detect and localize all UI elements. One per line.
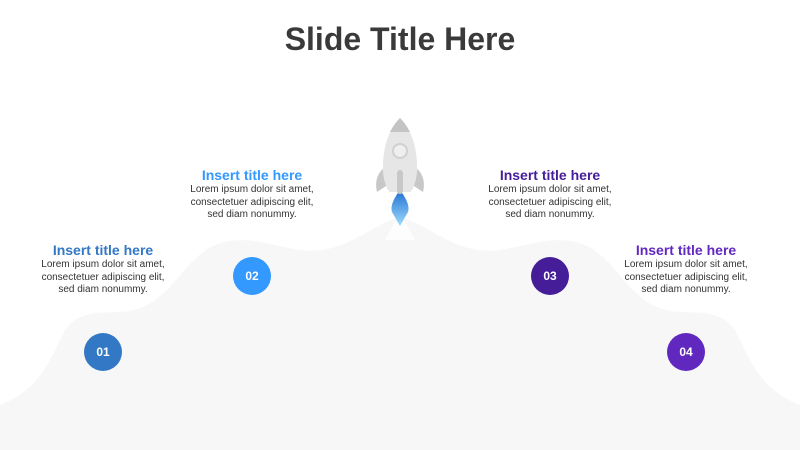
text block 04: Lorem ipsum dolor sit amet,: [624, 259, 748, 270]
text block 01: [41, 242, 165, 295]
title: Slide Title Here: [285, 21, 515, 57]
text block 03: [488, 167, 612, 220]
text block 02: consectetuer adipiscing elit,: [191, 196, 313, 208]
circle 04: [667, 333, 705, 371]
text block 02: Insert title here: [202, 167, 302, 183]
circle 04: 04: [679, 345, 693, 359]
circle 01: [84, 333, 122, 371]
text block 03: Lorem ipsum dolor sit amet,: [488, 184, 612, 195]
icon: rocket: [376, 118, 424, 226]
circle 03: [531, 257, 569, 295]
circle 01: 01: [96, 345, 110, 359]
text block 01: sed diam nonummy.: [58, 284, 148, 295]
circle 03: 03: [543, 269, 557, 283]
text block 01: Lorem ipsum dolor sit amet,: [41, 259, 165, 270]
text block 04: [624, 242, 748, 295]
text block 03: consectetuer adipiscing elit,: [489, 196, 611, 208]
text block 02: [190, 167, 314, 220]
text block 01: Insert title here: [53, 242, 153, 258]
text block 04: consectetuer adipiscing elit,: [625, 272, 747, 282]
text block 03: Insert title here: [500, 167, 600, 183]
text block 02: Lorem ipsum dolor sit amet,: [190, 184, 314, 195]
text block 01: consectetuer adipiscing elit,: [42, 272, 164, 282]
text block 04: Insert title here: [636, 242, 736, 258]
text block 02: sed diam nonummy.: [207, 209, 297, 220]
circle 02: [233, 257, 271, 295]
text block 04: sed diam nonummy.: [641, 284, 731, 295]
text block 03: sed diam nonummy.: [505, 209, 595, 220]
circle 02: 02: [245, 269, 259, 283]
